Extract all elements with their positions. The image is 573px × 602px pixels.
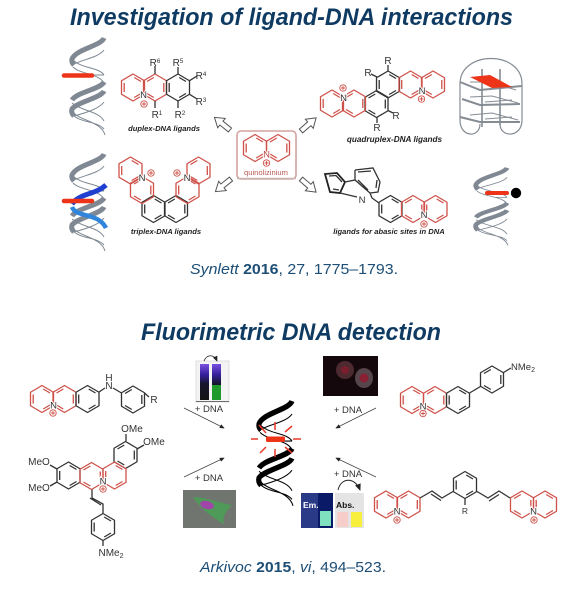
structure: duplex ligand: R: [196, 71, 203, 82]
structure: triplex ligand: [119, 157, 210, 222]
structure: NMe2-phenyl quinolizinium: [400, 362, 535, 417]
structure: NMe2-phenyl quinolizinium: 2: [531, 367, 535, 374]
structure: aminophenyl quinolizinium: H: [105, 373, 113, 384]
citation: Arkivoc: Arkivoc 2015, vi, 494–523.: [199, 559, 386, 576]
icon: duplex DNA helix with intercalator: [64, 38, 105, 135]
arrow: to triplex ligands: [212, 174, 235, 196]
structure: quadruplex ligand: R: [373, 123, 381, 134]
structure: bis-styryl quinolizinium: N: [394, 506, 401, 518]
structure: bis-styryl quinolizinium: [374, 472, 556, 523]
label: ligands for abasic sites in DNA: ligands for abasic sites in DNA: [333, 227, 445, 236]
label: quadruplex-DNA ligands: quadruplex-DNA ligands: [347, 135, 443, 144]
label: quinolizinium: quinolizinium: [244, 168, 288, 177]
label: + DNA lower right: + DNA: [334, 469, 363, 480]
panel: ligands for abasic sites: [325, 168, 521, 245]
arrow: top left to DNA: [184, 408, 224, 428]
structure: abasic site ligand: N: [359, 195, 366, 206]
icon: abasic DNA helix: [476, 168, 521, 245]
label: triplex-DNA ligands: triplex-DNA ligands: [131, 227, 201, 236]
structure: styryl berberine derivative: 2: [120, 553, 124, 560]
structure: styryl berberine derivative: NMe: [98, 548, 120, 559]
title: Fluorimetric DNA detection: Fluorimetric DNA detection: [141, 319, 441, 346]
structure: quadruplex ligand: R: [384, 56, 392, 67]
structure: abasic site ligand: [325, 168, 447, 227]
label: + DNA lower left: + DNA: [195, 473, 224, 484]
arrow: to quadruplex ligands: [297, 113, 320, 136]
structure: styryl berberine derivative: [28, 424, 165, 560]
image: tubes with fluorescence: [196, 356, 229, 402]
structure: aminophenyl quinolizinium: [30, 373, 158, 416]
structure: quadruplex ligand: N: [419, 86, 426, 97]
arrow: lower right to DNA: [336, 458, 376, 477]
panel: triplex-DNA ligands: [64, 154, 210, 251]
structure: duplex ligand: R: [175, 110, 182, 121]
title: Investigation of ligand-DNA interactions: Investigation of ligand-DNA interactions: [70, 4, 513, 31]
label: duplex-DNA ligands: duplex-DNA ligands: [128, 124, 200, 133]
structure: styryl berberine derivative: OMe: [143, 437, 165, 448]
structure: duplex ligand: 5: [180, 58, 184, 65]
label: + DNA top left: + DNA: [195, 404, 224, 415]
image: emission cuvettes: Em.: [303, 500, 319, 510]
structure: duplex ligand: 4: [203, 71, 207, 78]
structure: duplex ligand: 6: [157, 58, 161, 65]
icon: triplex DNA helix: [64, 154, 106, 251]
panel: quinolizinium core: [237, 131, 296, 179]
structure: duplex ligand: R: [196, 97, 203, 108]
image: dark cell micrograph: [323, 356, 378, 396]
panel: quadruplex-DNA ligands: [320, 56, 522, 144]
structure: bis-styryl quinolizinium: R: [462, 506, 468, 516]
panel: quinolizinium core: N: [263, 150, 270, 160]
structure: duplex ligand: R: [152, 110, 159, 121]
citation: Synlett: Synlett 2016, 27, 1775–1793.: [190, 261, 398, 278]
structure: duplex ligand: R: [150, 58, 157, 69]
arrow: to abasic site ligands: [297, 174, 320, 197]
arrow: lower left to DNA: [184, 458, 224, 477]
structure: duplex ligand: 2: [182, 110, 186, 117]
structure: styryl berberine derivative: MeO: [28, 483, 50, 494]
image: emission cuvettes: [301, 493, 333, 528]
structure: duplex ligand: [122, 58, 207, 121]
structure: NMe2-phenyl quinolizinium: N: [420, 402, 427, 412]
image: absorption cuvettes: [335, 493, 364, 528]
structure: NMe2-phenyl quinolizinium: NMe: [511, 362, 531, 373]
structure: triplex ligand: N: [184, 173, 191, 184]
arrow: to duplex ligands: [211, 113, 234, 135]
structure: aminophenyl quinolizinium: R: [150, 395, 158, 406]
structure: abasic site ligand: N: [421, 210, 428, 221]
structure: aminophenyl quinolizinium: N: [105, 381, 113, 392]
arrow: top right to DNA: [336, 408, 376, 428]
structure: duplex ligand: 3: [203, 97, 207, 104]
structure: quadruplex ligand: R: [364, 68, 372, 79]
structure: styryl berberine derivative: MeO: [28, 457, 50, 468]
structure: duplex ligand: N: [140, 90, 147, 101]
panel: duplex-DNA ligands: [64, 38, 207, 135]
structure: aminophenyl quinolizinium: N: [50, 400, 57, 412]
arrow: curved Em to Abs: [338, 480, 360, 490]
image: absorption cuvettes: Abs.: [336, 500, 354, 510]
structure: quadruplex ligand: [320, 56, 444, 134]
icon: central DNA with glowing ligand: [251, 401, 301, 506]
icon: G-quadruplex: [460, 58, 522, 134]
image: cell with green and magenta stain: [183, 490, 236, 528]
structure: triplex ligand: N: [139, 173, 146, 184]
structure: quadruplex ligand: R: [392, 111, 400, 122]
structure: styryl berberine derivative: N: [100, 476, 107, 488]
structure: bis-styryl quinolizinium: N: [530, 506, 537, 518]
structure: duplex ligand: 1: [159, 110, 163, 117]
structure: duplex ligand: R: [173, 58, 180, 69]
label: + DNA top right: + DNA: [334, 405, 363, 416]
structure: quadruplex ligand: N: [340, 93, 347, 104]
structure: styryl berberine derivative: OMe: [121, 424, 143, 435]
